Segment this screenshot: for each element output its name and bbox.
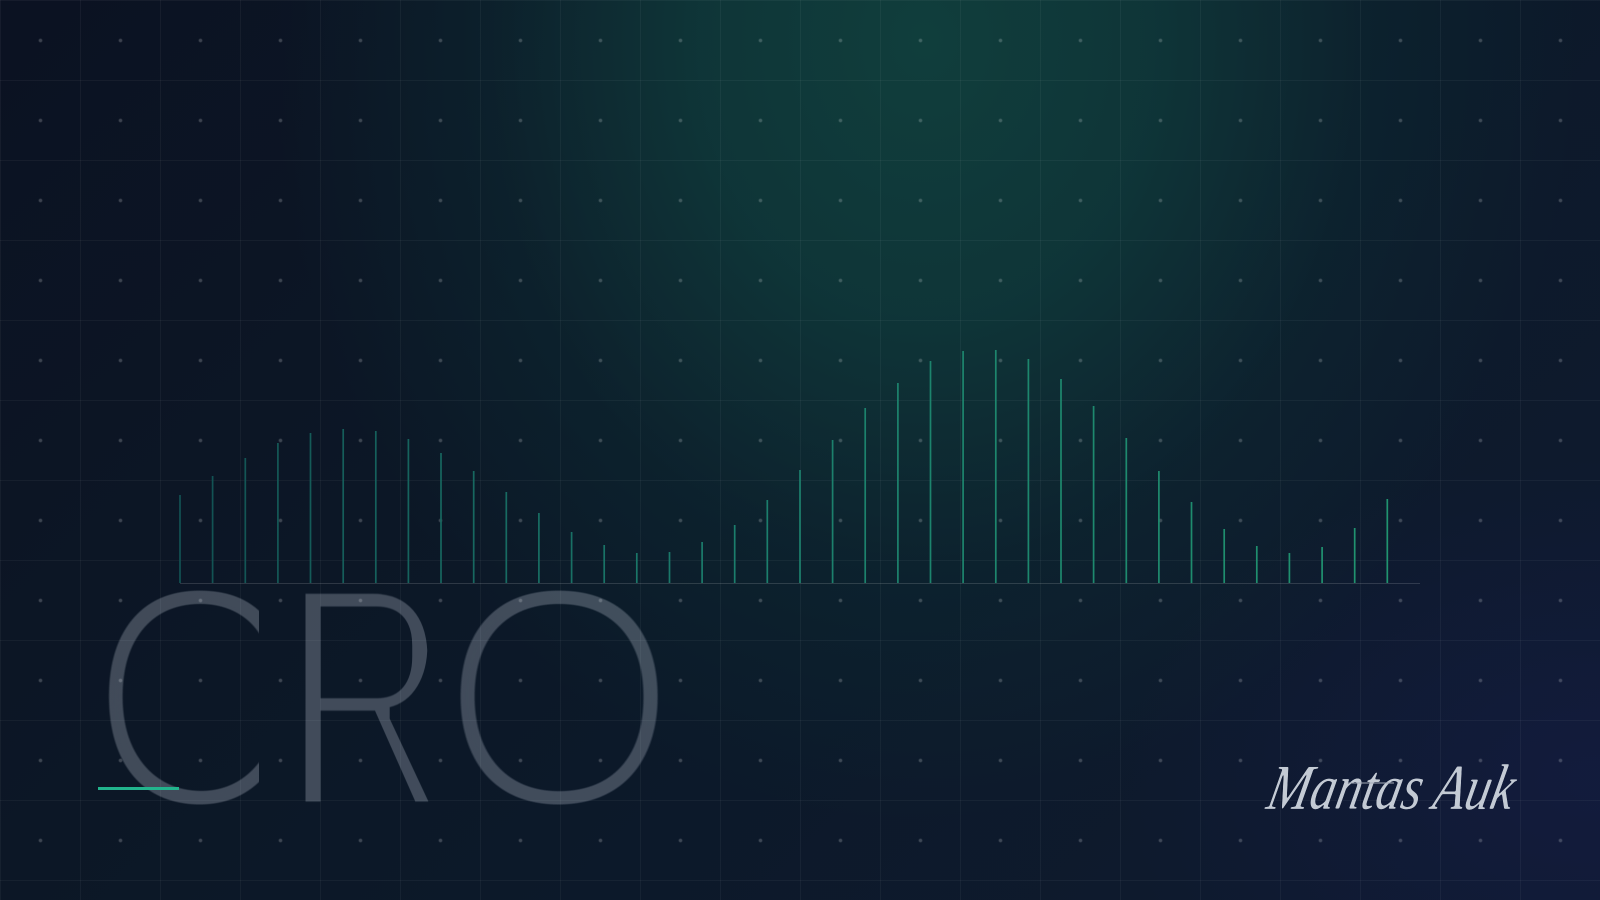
title: CRO: R [284, 520, 447, 875]
accent line [98, 787, 179, 790]
chart bars [180, 350, 1387, 583]
title: CRO: O [438, 520, 680, 875]
title: CRO: C [87, 520, 298, 875]
chart baseline [180, 582, 1420, 584]
signature: Mantas Auk: Mantas Auk [1261, 752, 1524, 823]
title: CRO [108, 520, 680, 875]
